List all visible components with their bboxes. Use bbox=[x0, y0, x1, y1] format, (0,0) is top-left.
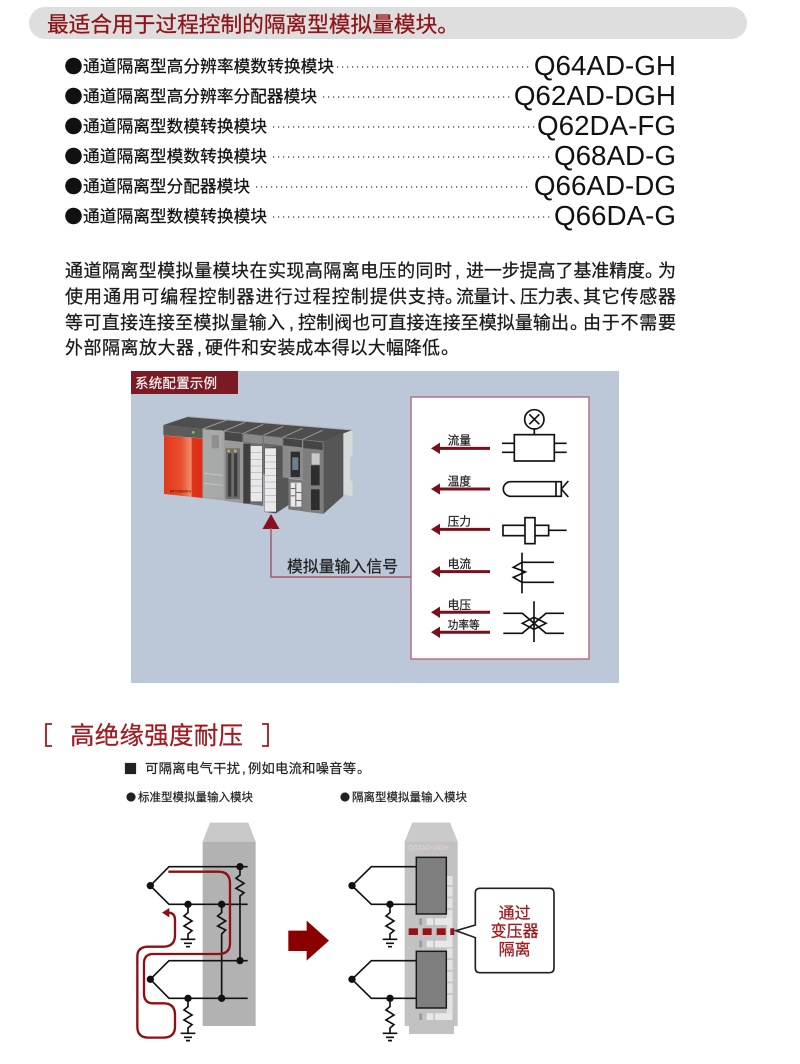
digital module bbox=[243, 433, 263, 506]
panel label bbox=[131, 371, 238, 394]
input signal label: 模拟量输入信号 bbox=[287, 558, 398, 576]
PLC illustration: MITSUBISHI bbox=[170, 490, 191, 494]
display module bbox=[283, 437, 303, 480]
front band bbox=[163, 425, 203, 438]
line 3: 控制阀也可直接连接至模拟量输出 bbox=[298, 313, 569, 333]
section note: 可隔离电气干扰 bbox=[145, 760, 240, 776]
section note: , bbox=[242, 761, 246, 776]
transformer isolation dashes bbox=[409, 928, 454, 935]
title bar bbox=[29, 7, 747, 39]
line 1: 。 bbox=[645, 261, 663, 281]
item: Q64AD-GH: Q64AD-GH bbox=[534, 50, 676, 81]
right side face bbox=[323, 433, 343, 514]
line 3: 等可直接连接至模拟量输入 bbox=[65, 313, 285, 333]
line 2: 、 bbox=[509, 287, 527, 307]
circuit: isolated module: Q62AD-DGH bbox=[408, 845, 449, 852]
label: isolated module: 隔离型模拟量输入模块 bbox=[352, 790, 468, 804]
noise current path bbox=[137, 872, 230, 1038]
line 4: 硬件和安装成本得以大幅降低 bbox=[205, 338, 440, 358]
section note: 例如电流和噪音等 bbox=[248, 760, 356, 776]
item: Q68AD-G bbox=[65, 140, 676, 171]
description paragraph bbox=[65, 261, 676, 358]
item: Q62DA-FG: Q62DA-FG bbox=[537, 110, 676, 141]
signal: pressure bbox=[431, 516, 567, 544]
signal: current bbox=[431, 553, 554, 593]
line 4: , bbox=[197, 338, 202, 358]
section note bbox=[125, 760, 370, 776]
signal: temperature bbox=[431, 474, 568, 497]
signal: flow: 流量 bbox=[448, 434, 471, 448]
line 1: 进一步提高了基准精度 bbox=[466, 261, 645, 281]
item: Q62AD-DGH: Q62AD-DGH bbox=[514, 80, 676, 111]
line 4: 外部隔离放大器 bbox=[65, 338, 194, 358]
callout: 隔离 bbox=[499, 941, 531, 959]
title bar: 最适合用于过程控制的隔离型模拟量模块。 bbox=[47, 13, 459, 37]
item: Q66AD-DG: Q66AD-DG bbox=[534, 170, 676, 201]
section note: 。 bbox=[357, 761, 370, 776]
input signal arrow bbox=[262, 514, 411, 577]
sensor box bbox=[411, 397, 589, 659]
top face bbox=[163, 417, 353, 442]
line 3: , bbox=[289, 313, 294, 333]
connector module bbox=[303, 439, 323, 514]
signal: voltage and power bbox=[431, 599, 564, 642]
line 2: 流量计 bbox=[456, 287, 509, 307]
red module bbox=[164, 436, 203, 498]
item: Q62AD-DGH bbox=[65, 80, 676, 111]
signal: voltage and power: 功率等 bbox=[448, 619, 480, 632]
line 1: , bbox=[455, 261, 460, 281]
line 2: 、 bbox=[573, 287, 591, 307]
signal: flow bbox=[431, 410, 567, 461]
section heading: 高绝缘强度耐压 bbox=[70, 722, 243, 750]
item: Q64AD-GH bbox=[65, 50, 676, 81]
item: Q64AD-GH: 通道隔离型高分辨率模数转换模块 bbox=[83, 57, 334, 76]
signal: temperature: 温度 bbox=[448, 474, 471, 488]
item: Q66DA-G bbox=[65, 200, 676, 231]
rail bbox=[343, 429, 353, 497]
panel label: 系统配置示例 bbox=[135, 376, 217, 391]
label: standard module: 标准型模拟量输入模块 bbox=[138, 790, 254, 804]
PLC illustration bbox=[163, 417, 353, 514]
item: Q62AD-DGH: 通道隔离型高分辨率分配器模块 bbox=[83, 87, 317, 106]
signal: voltage and power: 电压 bbox=[448, 599, 471, 612]
line 2: 使用通用可编程控制器进行过程控制提供支持 bbox=[65, 287, 445, 307]
cpu bbox=[203, 429, 224, 501]
circuit: isolated module bbox=[348, 823, 554, 1041]
signal: pressure: 压力 bbox=[448, 516, 471, 529]
analog module bbox=[263, 435, 283, 477]
line 3: 。 bbox=[570, 313, 588, 333]
item: Q62DA-FG bbox=[65, 110, 676, 141]
line 3: 由于不需要 bbox=[583, 313, 676, 333]
line 1 bbox=[65, 261, 676, 281]
item: Q66DA-G: Q66DA-G bbox=[554, 200, 676, 231]
callout: 变压器 bbox=[491, 923, 539, 941]
item: Q62DA-FG: 通道隔离型数模转换模块 bbox=[83, 117, 267, 136]
arrow: standard to isolated bbox=[288, 921, 329, 961]
product list bbox=[65, 50, 676, 231]
line 2: 。 bbox=[445, 287, 463, 307]
line 1: 为 bbox=[658, 261, 676, 281]
item: Q68AD-G: 通道隔离型模数转换模块 bbox=[83, 147, 267, 166]
callout: 通过 bbox=[499, 904, 531, 922]
line 1: 通道隔离型模拟量模块在实现高隔离电压的同时 bbox=[65, 261, 452, 281]
line 4: 。 bbox=[441, 338, 459, 358]
input module bbox=[224, 431, 243, 503]
circuit: standard module bbox=[137, 823, 329, 1041]
callout bbox=[456, 888, 554, 973]
panel: system configuration example bbox=[131, 371, 619, 683]
item: Q66AD-DG: 通道隔离型分配器模块 bbox=[83, 177, 250, 196]
line 2: 压力表 bbox=[520, 287, 573, 307]
line 3 bbox=[65, 313, 676, 333]
line 2: 其它传感器 bbox=[583, 287, 676, 307]
item: Q66AD-DG bbox=[65, 170, 676, 201]
item: Q68AD-G: Q68AD-G bbox=[554, 140, 676, 171]
item: Q66DA-G: 通道隔离型数模转换模块 bbox=[83, 207, 267, 226]
signal: current: 电流 bbox=[448, 557, 471, 571]
line 2 bbox=[65, 287, 676, 307]
line 4 bbox=[65, 338, 459, 358]
